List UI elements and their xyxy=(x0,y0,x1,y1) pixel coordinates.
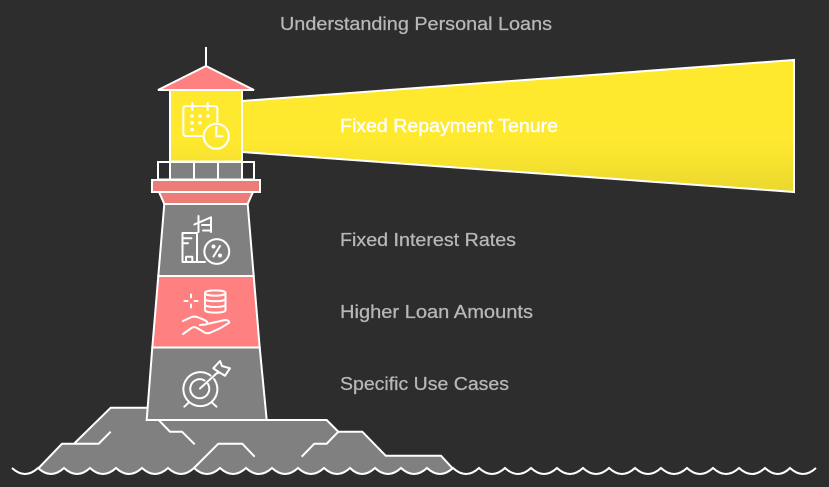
section: loan amounts xyxy=(152,276,260,348)
waves xyxy=(12,468,816,474)
section: interest rates xyxy=(158,204,254,276)
icon: calendar and clock xyxy=(183,103,229,149)
lighthouse xyxy=(147,47,267,420)
roof xyxy=(158,66,254,90)
label: specific use cases: Specific Use Cases xyxy=(340,374,509,394)
icon: hand with coins xyxy=(183,290,229,334)
gallery railing xyxy=(158,162,254,180)
section: use cases xyxy=(147,348,267,420)
label: fixed repayment tenure: Fixed Repayment Tenure xyxy=(340,116,558,136)
icon: buildings and percent xyxy=(182,216,229,264)
lantern room xyxy=(170,90,242,162)
light beam xyxy=(242,60,794,192)
label: fixed interest rates: Fixed Interest Rates xyxy=(340,230,516,250)
balcony xyxy=(152,180,260,192)
icon: target and arrow xyxy=(183,361,230,407)
title: Understanding Personal Loans xyxy=(280,14,552,34)
antenna xyxy=(205,47,207,66)
rocks xyxy=(39,408,452,474)
label: higher loan amounts: Higher Loan Amounts xyxy=(340,302,533,322)
balcony base xyxy=(159,192,253,204)
